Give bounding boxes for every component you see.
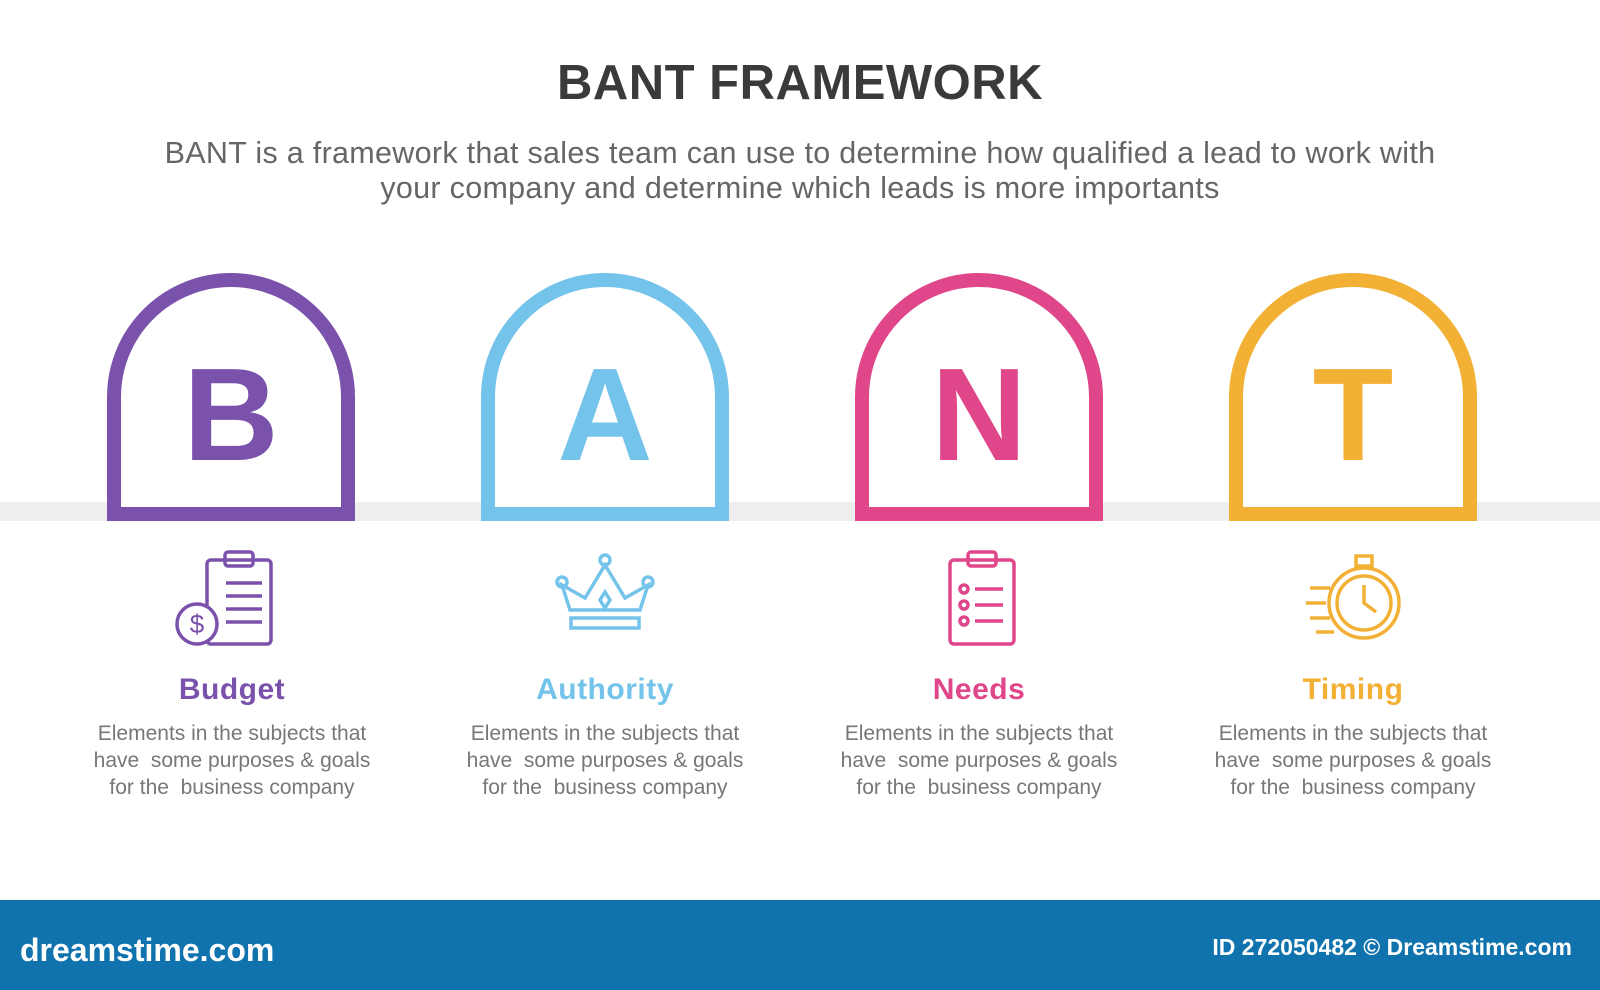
desc: Budget: Elements in the subjects that: [98, 722, 366, 745]
arch: T: T: [1313, 341, 1393, 488]
desc: Needs: [841, 722, 1117, 799]
desc: Needs: have some purposes & goals: [841, 749, 1117, 772]
desc: Budget: for the business company: [109, 776, 355, 799]
desc: Needs: Elements in the subjects that: [845, 722, 1113, 745]
label: Budget: Budget: [179, 673, 285, 706]
label: Timing: Timing: [1303, 673, 1403, 706]
icon: stopwatch: [1306, 556, 1399, 638]
subtitle: BANT is a framework that sales team can use to determine how qualified a lead to work with: [165, 136, 1435, 170]
desc: Budget: have some purposes & goals: [94, 749, 370, 772]
subtitle: your company and determine which leads is more importants: [380, 171, 1220, 205]
title: BANT FRAMEWORK: [557, 56, 1043, 110]
arch: N: [862, 280, 1096, 514]
footer bar: [0, 900, 1600, 990]
desc: Authority: for the business company: [482, 776, 728, 799]
gray band: [0, 502, 1600, 521]
footer logo: dreamstime.com: [20, 932, 274, 968]
desc: Authority: have some purposes & goals: [467, 749, 743, 772]
icon: needs checklist: [950, 552, 1014, 644]
label: Needs: Needs: [933, 673, 1025, 706]
icon: budget clipboard with coin: $: [190, 609, 205, 639]
arch: T: [1236, 280, 1470, 514]
desc: Needs: for the business company: [856, 776, 1102, 799]
desc: Timing: for the business company: [1230, 776, 1476, 799]
desc: Timing: [1215, 722, 1491, 799]
subtitle: [165, 136, 1435, 205]
desc: Timing: have some purposes & goals: [1215, 749, 1491, 772]
arch: N: N: [931, 341, 1027, 488]
icon: budget clipboard with coin: [177, 552, 271, 644]
desc: Authority: Elements in the subjects that: [471, 722, 739, 745]
desc: Budget: [94, 722, 370, 799]
arch: B: B: [183, 341, 279, 488]
arch: A: A: [557, 341, 653, 488]
desc: Authority: [467, 722, 743, 799]
arch: B: [114, 280, 348, 514]
desc: Timing: Elements in the subjects that: [1219, 722, 1487, 745]
icon: crown: [557, 555, 653, 628]
label: Authority: Authority: [536, 673, 674, 706]
arch: A: [488, 280, 722, 514]
footer id: ID 272050482 © Dreamstime.com: [1212, 934, 1572, 960]
